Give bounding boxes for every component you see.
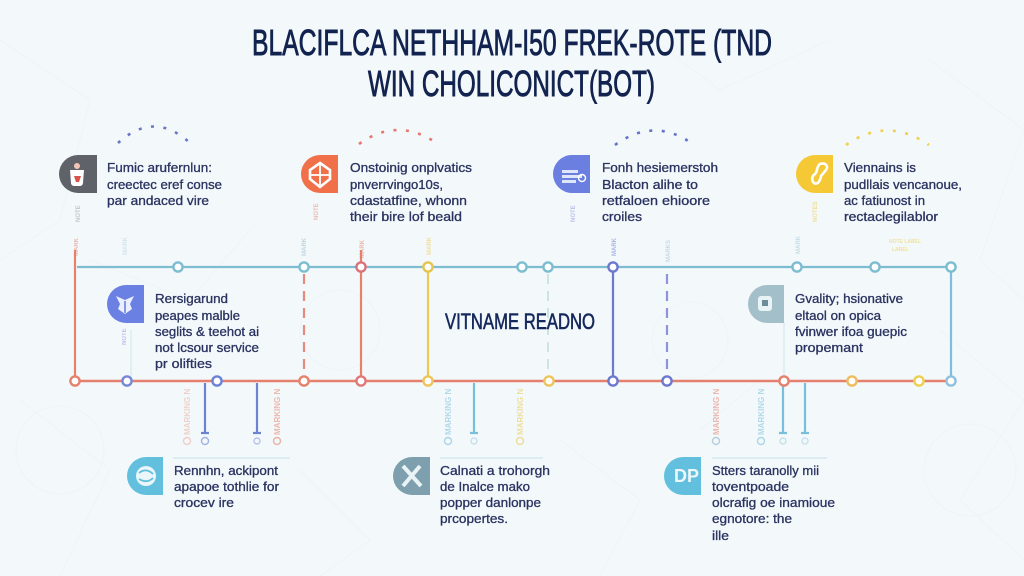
- icon: slate badge: [748, 285, 784, 323]
- text block: top 2: pnverrvingo10s,: [350, 178, 443, 192]
- text block: top 4: pudllais vencanoue,: [844, 178, 962, 192]
- small vertical annotations: MARK: [427, 236, 433, 255]
- small vertical annotations: NOTE: [571, 205, 577, 222]
- icon: cyan badge: [127, 457, 163, 495]
- icon: indigo badge: [553, 155, 590, 193]
- text block: top 3: croiles: [602, 210, 642, 224]
- small vertical annotations: MARK: [74, 237, 80, 256]
- small vertical annotations: MARK: [612, 237, 618, 256]
- divider and text: bottom 3: egnotore: the: [712, 512, 792, 526]
- text block: top 1: Fumic arufernlun:: [107, 161, 212, 175]
- text block: middle right: fvinwer ifoa guepic: [795, 325, 907, 339]
- icon: blue badge: [107, 285, 144, 323]
- text block: middle right: propemant: [795, 341, 864, 355]
- icon: gray badge: [59, 155, 97, 193]
- icon: yellow badge: [796, 155, 833, 193]
- text block: middle left: pr olifties: [155, 357, 212, 371]
- small vertical annotations: NOTE: [122, 328, 128, 345]
- small vertical annotations: MARKING N: [516, 389, 525, 435]
- divider and text: bottom 1: apapoe tothlie for: [174, 480, 279, 494]
- small vertical annotations: MARKING N: [273, 389, 282, 435]
- text block: middle right: Gvality; hsionative: [795, 292, 903, 306]
- divider and text: bottom 1: Rennhn, ackipont: [174, 464, 279, 478]
- text block: top 4: Viennains is: [844, 161, 916, 175]
- text block: middle left: Rersigarund: [155, 292, 228, 306]
- text block: top 4: ac fatiunost in: [844, 194, 925, 208]
- small vertical annotations: MARKS: [666, 240, 672, 262]
- text block: top 4: [844, 161, 962, 224]
- divider and text: bottom 2: popper danlonpe: [440, 496, 541, 510]
- divider and text: bottom 3: olcrafig oe inamioue: [712, 496, 835, 510]
- divider and text: bottom 3: [712, 458, 835, 543]
- title: WIN CHOLICONICT(BOT): [368, 63, 655, 104]
- text block: top 1: creectec eref conse: [107, 178, 222, 192]
- text block: top 4: rectaclegilablor: [844, 210, 938, 224]
- text block: middle left: not lcsour service: [155, 341, 259, 355]
- dotted arc: yellow: [846, 130, 929, 145]
- title: BLACIFLCA NETHHAM-I50 FREK-ROTE (TND: [252, 22, 772, 63]
- small vertical annotations: NOTE: [76, 205, 82, 222]
- small vertical annotations: NOTE LABEL: [889, 239, 921, 245]
- divider and text: bottom 2: prcopertes.: [440, 512, 508, 526]
- divider and text: bottom 2: Calnati a trohorgh: [440, 464, 550, 478]
- text block: middle left: [155, 292, 259, 371]
- small vertical annotations: [74, 201, 921, 435]
- text block: top 1: par andaced vire: [107, 194, 209, 208]
- text block: middle right: eltaol on opica: [795, 309, 881, 323]
- icon: steel badge: [393, 457, 430, 495]
- timeline diagram: [70, 250, 956, 433]
- icon: orange badge: [301, 155, 338, 193]
- small vertical annotations: NOTES: [813, 201, 819, 222]
- small vertical annotations: MARKING N: [183, 389, 192, 435]
- small vertical annotations: MARK: [123, 236, 129, 255]
- icon: sky badge: [664, 457, 701, 495]
- text block: top 2: their bire lof beald: [350, 210, 462, 224]
- text block: middle left: seglits & teehot ai: [155, 325, 259, 339]
- divider and text: bottom 2: [440, 458, 550, 526]
- small vertical annotations: MARKING N: [712, 389, 721, 435]
- text block: top 2: [350, 161, 472, 224]
- text block: top 2: Onstoinig onplvatics: [350, 161, 472, 175]
- small vertical annotations: LABEL: [892, 247, 909, 253]
- text block: middle right: [795, 292, 907, 355]
- text block: top 2: cdastatfine, whonn: [350, 194, 467, 208]
- divider and text: bottom 1: [173, 458, 290, 510]
- divider and text: bottom 3: toventpoade: [712, 480, 789, 494]
- center label: VITNAME READNO: [445, 309, 595, 334]
- small vertical annotations: MARK: [360, 239, 366, 258]
- icon: sky badge: DP: [674, 466, 699, 486]
- small vertical annotations: MARKING N: [757, 389, 766, 435]
- small end markers: [184, 438, 808, 444]
- dotted arc: indigo: [615, 130, 694, 145]
- dotted arc: purple: [118, 126, 190, 143]
- divider and text: bottom 3: ille: [712, 529, 729, 543]
- title: [252, 22, 772, 104]
- text block: middle left: peapes malble: [155, 309, 240, 323]
- text block: top 3: Fonh hesiemerstoh: [602, 161, 718, 175]
- divider and text: bottom 3: Stters taranolly mii: [712, 464, 819, 478]
- divider and text: bottom 1: crocev ire: [174, 496, 234, 510]
- small vertical annotations: MARK: [302, 237, 308, 256]
- divider and text: bottom 2: de Inalce mako: [440, 480, 530, 494]
- text block: top 3: retfaloen ehioore: [602, 194, 710, 208]
- small vertical annotations: MARKING N: [444, 389, 453, 435]
- text block: top 3: Blacton alihe to: [602, 178, 698, 192]
- small vertical annotations: MARK: [796, 235, 802, 254]
- text block: top 1: [107, 161, 222, 208]
- dotted arc: red: [359, 130, 438, 144]
- small vertical annotations: NOTE: [314, 203, 320, 220]
- text block: top 3: [602, 161, 718, 224]
